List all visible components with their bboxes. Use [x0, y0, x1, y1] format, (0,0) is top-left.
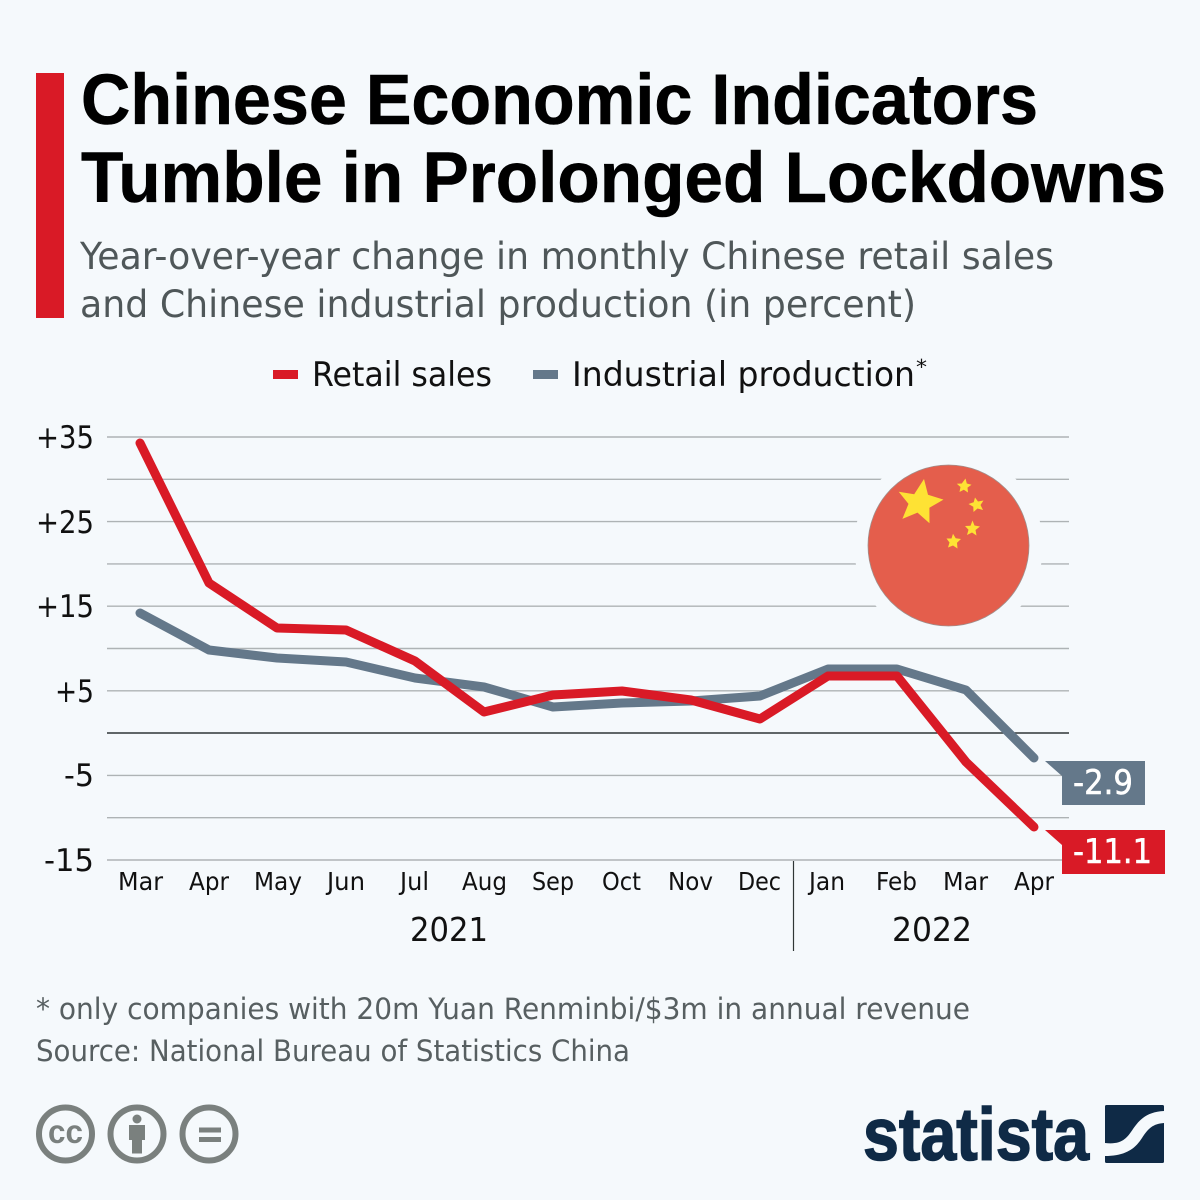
y axis labels [36, 420, 94, 879]
x axis month labels: Dec [738, 867, 781, 896]
red title accent bar [36, 73, 64, 318]
creative commons icons [39, 1108, 236, 1160]
x axis month labels [118, 867, 1055, 896]
line: retail sales [140, 443, 1034, 827]
x axis month labels: Aug [462, 867, 507, 896]
x axis month labels: Mar [118, 867, 164, 896]
x axis year labels [410, 910, 972, 949]
y axis labels: +5 [55, 674, 94, 710]
x axis month labels: Apr [1014, 867, 1055, 896]
y axis labels: +15 [36, 589, 94, 625]
statista logo: statista [863, 1093, 1090, 1176]
x axis month labels: Jun [325, 867, 365, 896]
line: industrial production [140, 613, 1034, 758]
china flag [854, 451, 1043, 640]
y axis labels: -5 [64, 758, 94, 794]
y axis labels: -15 [44, 843, 94, 879]
x axis month labels: Apr [189, 867, 230, 896]
subtitle: Year-over-year change in monthly Chinese retail sales [79, 235, 1054, 278]
legend [273, 355, 927, 395]
title: Tumble in Prolonged Lockdowns [81, 139, 1166, 218]
footnote and source: * only companies with 20m Yuan Renminbi/$3m in annual revenue [36, 992, 970, 1026]
value label: retail sales -11.1: -11.1 [1073, 832, 1152, 872]
x axis month labels: Mar [943, 867, 989, 896]
footnote and source: Source: National Bureau of Statistics China [36, 1034, 630, 1068]
x axis month labels: Jul [398, 867, 429, 896]
x axis month labels: Sep [532, 867, 574, 896]
legend: * [916, 355, 927, 379]
legend: Retail sales [312, 355, 492, 395]
x axis month labels: Jan [807, 867, 845, 896]
value label: industrial production -2.9 [1045, 761, 1145, 805]
title: Chinese Economic Indicators [81, 61, 1038, 140]
x axis year labels: 2021 [410, 910, 488, 949]
subtitle [79, 235, 1054, 326]
x axis month labels: Nov [668, 867, 713, 896]
creative commons icons: cc [48, 1113, 83, 1150]
y axis labels: +25 [36, 505, 94, 541]
x axis month labels: Oct [602, 867, 641, 896]
y axis labels: +35 [36, 420, 94, 456]
legend: Industrial production [572, 355, 915, 395]
x axis month labels: Feb [876, 867, 917, 896]
subtitle: and Chinese industrial production (in percent) [80, 283, 916, 326]
footnote and source [36, 992, 970, 1068]
title [81, 61, 1166, 218]
value label: industrial production -2.9: -2.9 [1073, 763, 1133, 803]
x axis month labels: May [254, 867, 302, 896]
value label: retail sales -11.1 [1045, 830, 1165, 874]
x axis year labels: 2022 [892, 910, 972, 949]
